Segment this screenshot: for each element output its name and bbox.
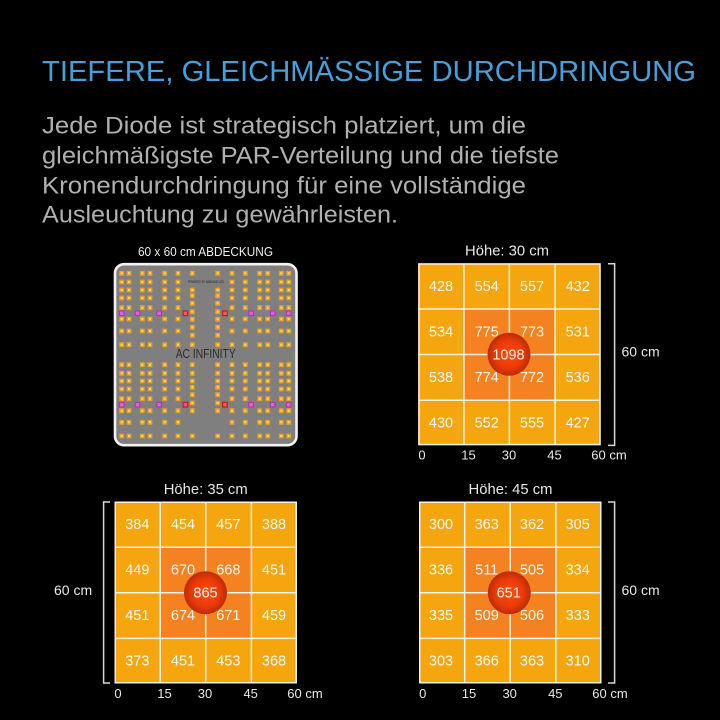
values: 384 <box>125 517 149 533</box>
values: 773 <box>520 324 544 340</box>
centre reading <box>488 571 531 614</box>
values: 459 <box>262 608 286 624</box>
values: 671 <box>216 608 240 624</box>
yellow diodes <box>122 273 289 436</box>
centre reading: 1098 <box>492 347 525 363</box>
values: 363 <box>520 654 544 670</box>
values: 555 <box>520 416 544 432</box>
values: 454 <box>171 517 195 533</box>
values: 457 <box>216 517 240 533</box>
LED board <box>115 264 296 445</box>
centre reading <box>184 571 227 614</box>
values: 668 <box>216 562 240 578</box>
panel: height 30 cm <box>418 244 660 462</box>
axis labels <box>418 448 627 462</box>
axis labels: 30 <box>502 448 516 462</box>
values: 362 <box>520 517 544 533</box>
centre reading <box>488 333 530 376</box>
values: 506 <box>520 608 544 624</box>
body text: Kronendurchdringung für eine vollständige <box>42 172 526 200</box>
values: 674 <box>171 608 195 624</box>
values: 303 <box>429 654 453 670</box>
values: 772 <box>520 370 544 386</box>
grid <box>418 263 601 445</box>
values: 552 <box>475 416 499 432</box>
centre reading: 651 <box>497 586 521 602</box>
values <box>429 279 590 432</box>
magenta diodes <box>119 311 291 407</box>
heading: Höhe: 45 cm <box>469 482 552 498</box>
values: 333 <box>566 608 590 624</box>
title: TIEFERE, GLEICHMÄSSIGE DURCHDRINGUNG <box>42 56 696 88</box>
bracket <box>104 502 110 683</box>
bracket <box>608 502 615 683</box>
coverage heading: 60 x 60 cm ABDECKUNG <box>138 244 273 259</box>
values: 505 <box>520 562 544 578</box>
values: 430 <box>429 416 453 432</box>
board logo: AC INFINITY <box>176 347 236 361</box>
axis labels: 15 <box>157 686 172 701</box>
values: 300 <box>429 517 453 533</box>
body text <box>42 112 559 228</box>
values: 334 <box>566 562 590 578</box>
heading: Höhe: 30 cm <box>465 244 549 260</box>
axis labels: 45 <box>547 448 562 462</box>
values: 428 <box>429 279 453 295</box>
values: 373 <box>125 654 149 670</box>
values: 335 <box>429 608 453 624</box>
body text: Ausleuchtung zu gewährleisten. <box>42 202 398 228</box>
centre reading: 865 <box>193 586 218 602</box>
axis labels: 45 <box>243 686 258 701</box>
axis labels: 0 <box>418 448 426 462</box>
heading: Höhe: 35 cm <box>164 482 248 498</box>
axis labels <box>419 686 628 701</box>
values: 336 <box>429 562 453 578</box>
values: 538 <box>429 370 453 386</box>
axis labels: 60 cm <box>287 686 323 701</box>
side label: 60 cm <box>622 582 660 598</box>
axis labels: 15 <box>462 686 476 701</box>
bracket <box>608 264 615 445</box>
values: 453 <box>216 654 240 670</box>
values: 775 <box>475 324 499 340</box>
red diodes <box>183 311 227 407</box>
small board print: POWERED BY SAMSUNG LED <box>188 280 225 284</box>
values: 427 <box>566 416 590 432</box>
panel: height 35 cm <box>54 482 323 701</box>
values <box>125 517 286 670</box>
values: 305 <box>566 517 590 533</box>
axis labels: 0 <box>114 686 122 701</box>
values: 310 <box>566 654 590 670</box>
values: 534 <box>429 324 453 340</box>
side label: 60 cm <box>622 344 660 360</box>
values: 554 <box>475 279 499 295</box>
body text: gleichmäßigste PAR-Verteilung und die tiefste <box>42 142 559 170</box>
axis labels: 45 <box>548 686 563 701</box>
values: 536 <box>566 370 590 386</box>
panel: LED board coverage <box>115 244 296 445</box>
grid <box>419 502 602 684</box>
axis labels <box>114 686 323 701</box>
grid <box>114 502 297 684</box>
values: 449 <box>125 562 149 578</box>
values: 509 <box>475 608 499 624</box>
axis labels: 60 cm <box>591 448 627 462</box>
values: 368 <box>262 654 286 670</box>
values: 432 <box>566 279 590 295</box>
side label: 60 cm <box>54 582 92 598</box>
values: 451 <box>125 608 149 624</box>
axis labels: 15 <box>461 448 476 462</box>
values: 557 <box>520 279 544 295</box>
axis labels: 60 cm <box>592 686 628 701</box>
values: 363 <box>475 517 499 533</box>
axis labels: 30 <box>502 686 517 701</box>
axis labels: 0 <box>419 686 426 701</box>
values <box>429 517 590 670</box>
values: 366 <box>475 654 499 670</box>
values: 670 <box>171 562 195 578</box>
body text: Jede Diode ist strategisch platziert, um die <box>42 112 526 140</box>
values: 451 <box>171 654 195 670</box>
panel: height 45 cm <box>419 482 660 701</box>
axis labels: 30 <box>198 686 212 701</box>
values: 774 <box>475 370 499 386</box>
values: 451 <box>262 562 286 578</box>
values: 511 <box>475 562 498 578</box>
values: 531 <box>566 324 590 340</box>
values: 388 <box>262 517 286 533</box>
